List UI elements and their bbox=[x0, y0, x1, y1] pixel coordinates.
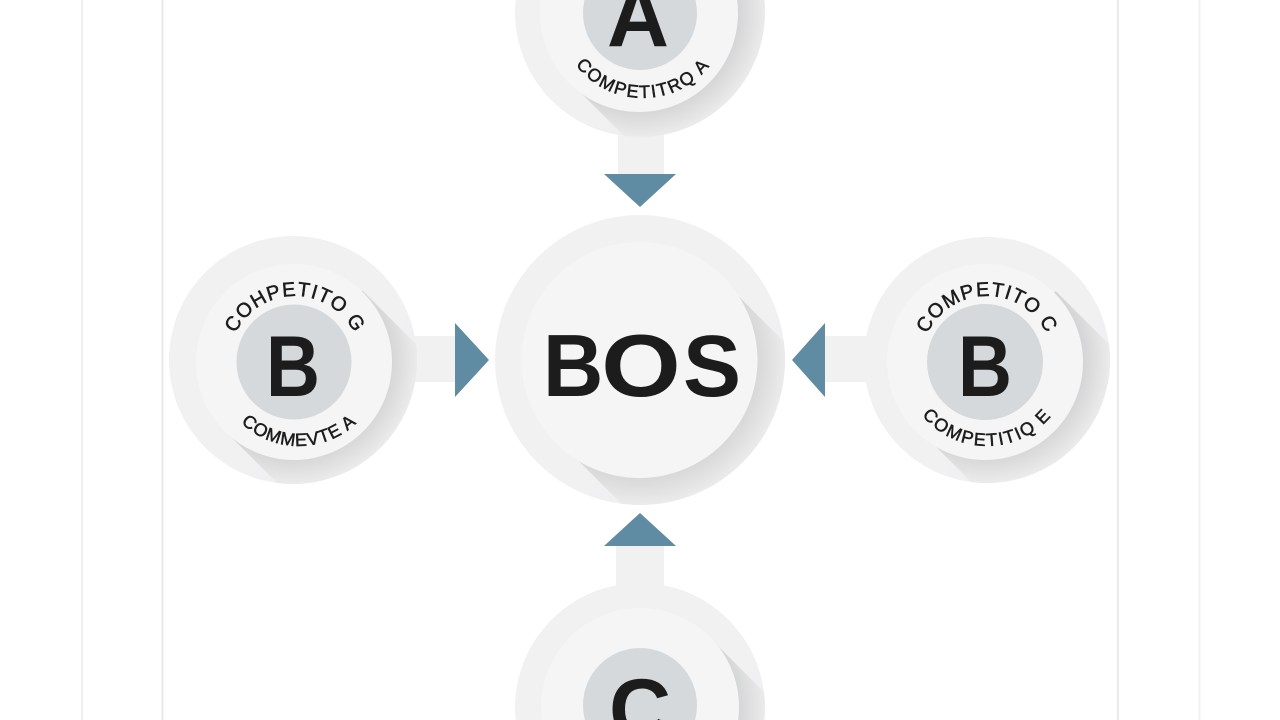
node: competitor A (top) bbox=[515, 0, 765, 135]
connector: top bbox=[618, 130, 664, 176]
connector: left bbox=[410, 336, 455, 382]
right curved label bottom: COMPETITIQ E bbox=[924, 408, 1051, 446]
left outer ring with long shadow bbox=[169, 236, 415, 484]
right curved label top: COMPETITO C bbox=[918, 282, 1056, 331]
top curved label: COMPETITRQ A bbox=[578, 59, 710, 98]
left curved label bottom: COMMEVTE A bbox=[243, 416, 357, 446]
left inner disc bbox=[196, 264, 392, 460]
arrow: bottom pointing up bbox=[604, 513, 676, 546]
connector: right bbox=[825, 336, 870, 382]
left grey badge bbox=[236, 304, 352, 420]
node: competitor C (bottom) bbox=[515, 586, 765, 720]
right letter: B bbox=[958, 319, 1012, 415]
left letter: B bbox=[266, 319, 320, 415]
centre label: B bbox=[543, 317, 603, 415]
top inner disc bbox=[540, 0, 738, 112]
node: competitor B (right) bbox=[866, 237, 1110, 483]
centre label: S bbox=[683, 318, 741, 415]
centre outer ring with long shadow bbox=[495, 215, 785, 505]
node: centre BOS bbox=[495, 215, 785, 505]
arrow: left pointing right bbox=[455, 323, 489, 397]
centre inner disc bbox=[522, 242, 758, 478]
bottom outer ring with long shadow bbox=[515, 586, 765, 720]
connector: bottom bbox=[616, 545, 664, 590]
right outer ring with long shadow bbox=[866, 237, 1110, 483]
arrow: right pointing left bbox=[792, 323, 825, 397]
node: competitor B (left) bbox=[169, 236, 415, 484]
left curved label top: COHPETITO G bbox=[226, 282, 364, 330]
centre label: O bbox=[601, 318, 681, 415]
centre label bbox=[543, 317, 741, 415]
bottom inner disc bbox=[541, 608, 739, 720]
top grey badge bbox=[583, 0, 697, 70]
bottom grey badge bbox=[583, 648, 697, 720]
top outer ring with long shadow bbox=[515, 0, 765, 135]
right grey badge bbox=[927, 304, 1043, 420]
arrow: top pointing down bbox=[604, 174, 676, 207]
right inner disc bbox=[887, 264, 1083, 460]
